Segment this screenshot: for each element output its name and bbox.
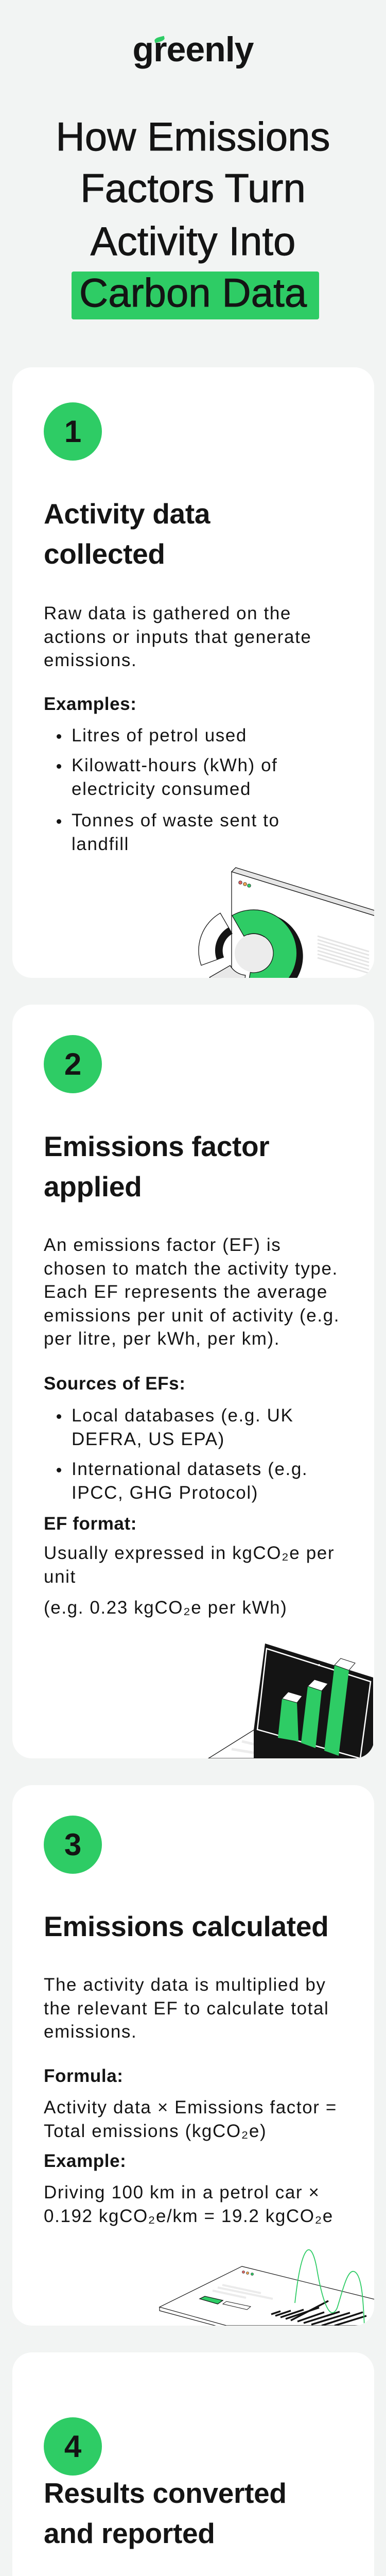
heading 2: Emissions factor: [44, 1130, 269, 1162]
text: step 3 body: The activity data is multiplied by: [44, 1975, 326, 1995]
bullet list: sources: [57, 1405, 308, 1502]
badge 3: 3: [64, 1827, 81, 1862]
panel: step 2 emissions factor: [12, 1005, 374, 1758]
heading 1: Activity data: [44, 498, 210, 530]
panel: step 1 activity data: [12, 367, 374, 978]
text: EF example: (e.g. 0.23 kgCO₂e per kWh): [44, 1598, 287, 1618]
heading 4: [44, 2477, 287, 2549]
bullet list: examples: landfill: [72, 834, 129, 854]
heading 2: applied: [44, 1171, 142, 1202]
panel: step 3 emissions calculated: [12, 1785, 374, 2326]
text: EF format: unit: [44, 1566, 76, 1587]
bullet list: examples: [57, 725, 280, 854]
text: step 3 body: [44, 1975, 329, 2042]
text: step 3 body: the relevant EF to calculate total: [44, 1998, 329, 2019]
text: step 2 body: An emissions factor (EF) is: [44, 1235, 281, 1255]
illustration: laptop with bar chart: [208, 1643, 373, 1758]
bullet list: examples: Tonnes of waste sent to: [72, 810, 280, 831]
bullet list: examples: Litres of petrol used: [72, 725, 247, 745]
badge 2: [44, 1035, 102, 1093]
subheading: examples: Examples:: [44, 694, 137, 714]
text: EF format: [44, 1543, 335, 1587]
subheading: sources: Sources of EFs:: [44, 1374, 185, 1394]
subheading: example: Example:: [44, 2151, 126, 2171]
heading 1: [44, 498, 210, 570]
title: How Emissions: [56, 114, 330, 159]
bullet list: examples: electricity consumed: [72, 779, 251, 799]
bullet list: sources: DEFRA, US EPA): [72, 1429, 225, 1449]
text: step 3 body: emissions.: [44, 2022, 137, 2042]
panel: step 4 results reported: [12, 2352, 374, 2576]
heading 3: Emissions calculated: [44, 1910, 328, 1942]
text: step 1 body: actions or inputs that generate: [44, 626, 311, 647]
heading 2: [44, 1130, 269, 1202]
text: step 2 body: per litre, per kWh, per km).: [44, 1329, 280, 1349]
text: step 1 body: emissions.: [44, 650, 137, 670]
subheading: EF format: EF format:: [44, 1514, 137, 1534]
title: Carbon Data: [79, 270, 307, 315]
heading 1: collected: [44, 538, 165, 570]
badge 2: 2: [64, 1047, 81, 1081]
text: formula: Activity data × Emissions factor =: [44, 2097, 337, 2117]
text: EF format: Usually expressed in kgCO₂e per: [44, 1543, 335, 1563]
badge 1: [44, 402, 102, 461]
illustration: flat laptop with wave chart: [159, 2249, 374, 2326]
bullet list: sources: International datasets (e.g.: [72, 1459, 308, 1479]
title: [56, 114, 330, 319]
badge 3: [44, 1816, 102, 1874]
logo: greenly: greenly: [133, 30, 253, 69]
heading 4: and reported: [44, 2517, 215, 2549]
text: step 2 body: chosen to match the activity type.: [44, 1258, 338, 1279]
bullet list: sources: IPCC, GHG Protocol): [72, 1483, 258, 1502]
text: example: 0.192 kgCO₂e/km = 19.2 kgCO₂e: [44, 2206, 334, 2226]
text: formula: [44, 2097, 337, 2141]
bullet list: sources: Local databases (e.g. UK: [72, 1405, 293, 1426]
text: step 2 body: emissions per unit of activity (e.g.: [44, 1306, 340, 1325]
text: step 2 body: [44, 1235, 340, 1349]
badge 1: 1: [64, 414, 81, 449]
title: Factors Turn: [80, 165, 306, 211]
badge 4: [44, 2417, 102, 2476]
subheading: formula: Formula:: [44, 2066, 124, 2086]
text: step 1 body: Raw data is gathered on the: [44, 603, 291, 623]
title: Activity Into: [91, 218, 295, 264]
heading 4: Results converted: [44, 2477, 287, 2509]
badge 4: 4: [64, 2429, 81, 2464]
text: example: Driving 100 km in a petrol car ×: [44, 2182, 320, 2202]
text: step 2 body: Each EF represents the average: [44, 1282, 328, 1302]
text: example: [44, 2182, 334, 2226]
text: step 1 body: [44, 603, 311, 670]
bullet list: examples: Kilowatt-hours (kWh) of: [72, 755, 278, 775]
text: formula: Total emissions (kgCO₂e): [44, 2121, 267, 2141]
illustration: monitor with donut chart: [198, 867, 374, 978]
